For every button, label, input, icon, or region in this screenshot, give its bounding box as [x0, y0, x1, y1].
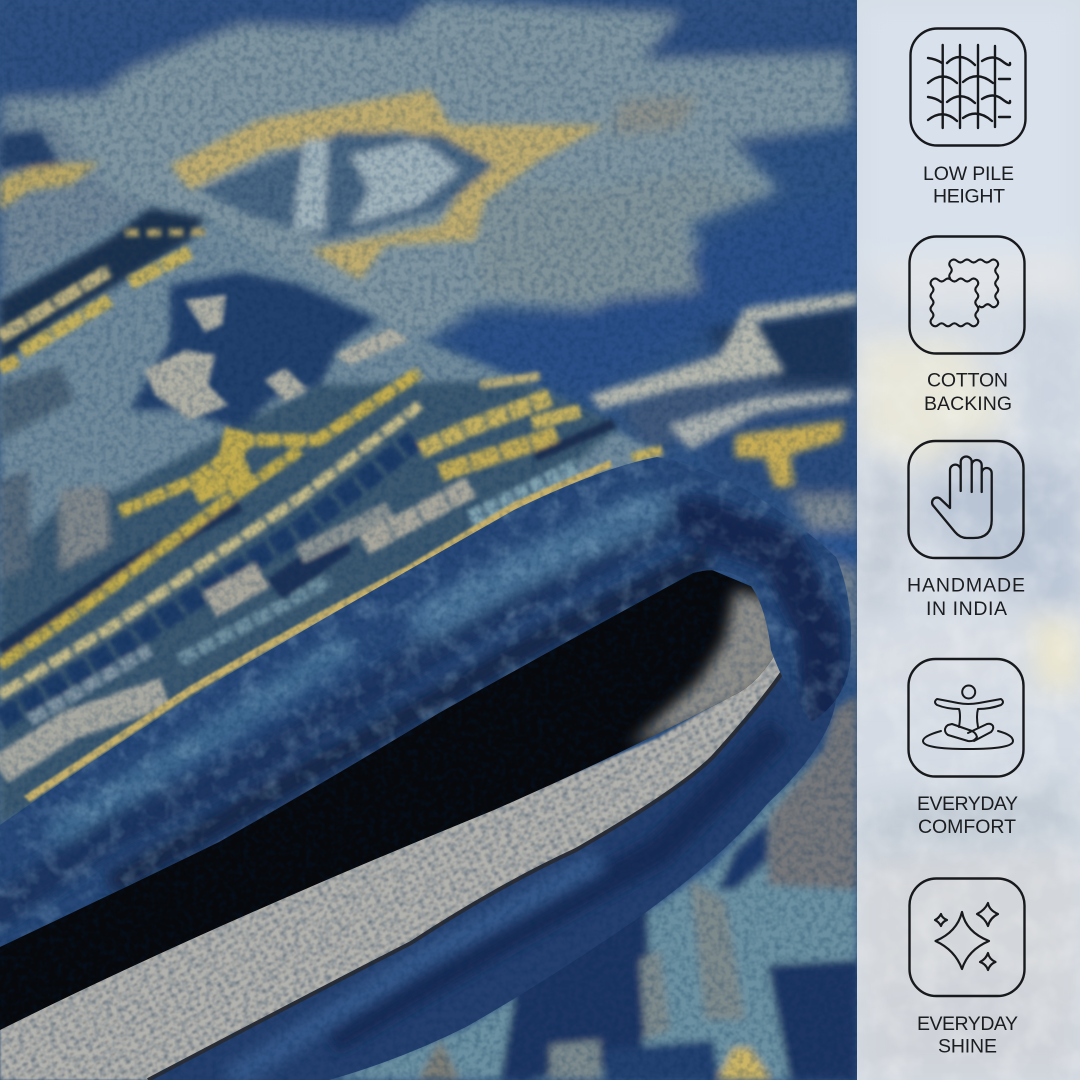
- label: [907, 575, 1025, 620]
- label: [924, 370, 1012, 415]
- label: COMFORT: [918, 816, 1016, 838]
- rug top surface: [0, 208, 665, 825]
- icon: cotton swatches: [910, 236, 1024, 354]
- label: [917, 793, 1018, 838]
- label: EVERYDAY: [917, 793, 1018, 815]
- icon: meditating figure: [908, 659, 1024, 776]
- blue binding edge: [140, 660, 840, 1080]
- label: HANDMADE: [907, 575, 1025, 597]
- icon: hand: [908, 441, 1024, 558]
- feature: low pile height: [910, 28, 1026, 208]
- label: LOW PILE: [923, 163, 1014, 185]
- label: COTTON: [927, 370, 1008, 392]
- feature: everyday comfort: [908, 659, 1024, 838]
- dark hollow under the fold: [0, 565, 778, 1030]
- icon: sparkles: [910, 878, 1024, 996]
- wool texture: [0, 0, 857, 1080]
- lower rug: [329, 695, 857, 1080]
- feature: everyday shine: [910, 878, 1024, 1058]
- feature: cotton backing: [910, 236, 1024, 415]
- blue rolled band: [0, 450, 860, 960]
- knit inside the fold, fading into shadow: [630, 590, 785, 745]
- blurred yellow medallion: [0, 90, 857, 488]
- side panel background: [857, 0, 1080, 1080]
- label: HEIGHT: [933, 186, 1005, 208]
- stitched stripes: [0, 232, 662, 770]
- grey cotton backing: [0, 648, 790, 1080]
- label: SHINE: [938, 1036, 997, 1058]
- label: [923, 163, 1014, 208]
- pale patches: [145, 295, 410, 420]
- label: [917, 1013, 1018, 1058]
- icon: woven pile: [910, 28, 1026, 146]
- label: BACKING: [924, 393, 1012, 415]
- feature: handmade in india: [907, 441, 1025, 620]
- yellow border stripe: [24, 460, 612, 802]
- label: IN INDIA: [926, 598, 1007, 620]
- navy and blue patches: [0, 208, 620, 825]
- blurred rug field pattern: [0, 0, 857, 690]
- photo: rolled blue rug: [0, 0, 860, 1080]
- seam line: [148, 670, 784, 1080]
- label: EVERYDAY: [917, 1013, 1018, 1035]
